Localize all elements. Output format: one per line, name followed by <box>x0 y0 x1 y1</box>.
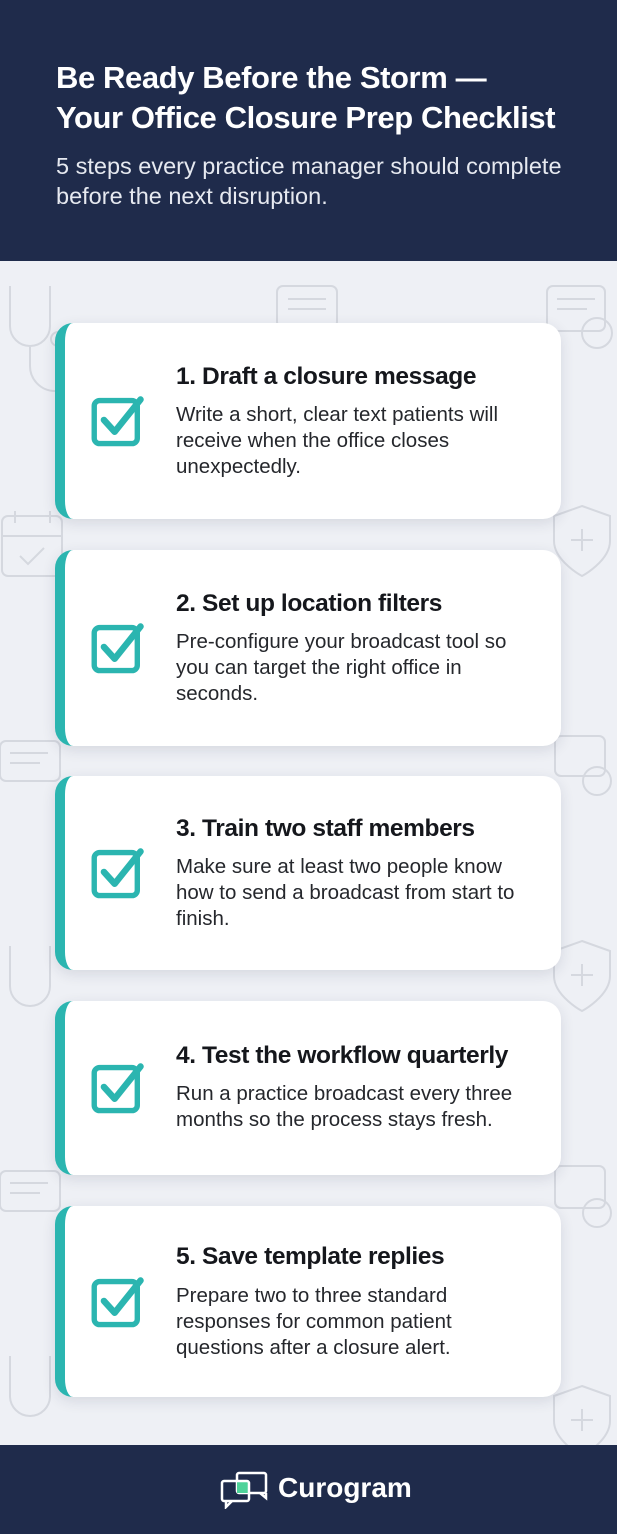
icon: checkbox <box>92 1277 144 1328</box>
step 5 text <box>176 1284 452 1359</box>
brand name: Curogram <box>278 1472 412 1503</box>
step 2 text <box>176 630 506 705</box>
step 4 text: months so the process stays fresh. <box>176 1108 493 1131</box>
header: Your Office Closure Prep Checklist <box>56 100 555 135</box>
subtitle: 5 steps every practice manager should complete <box>56 153 562 179</box>
step 1 text: Write a short, clear text patients will <box>176 403 498 426</box>
step 4 text: Run a practice broadcast every three <box>176 1082 512 1105</box>
step 1 text <box>176 403 498 478</box>
step 3 text <box>176 855 514 930</box>
step 3 text: how to send a broadcast from start to <box>176 881 514 904</box>
card 2 <box>55 550 561 746</box>
step 1 text: unexpectedly. <box>176 455 301 478</box>
step 3 title: 3. Train two staff members <box>176 815 475 842</box>
header: before the next disruption. <box>56 183 328 209</box>
logo <box>220 1472 412 1509</box>
card 4 <box>55 1001 561 1175</box>
icon: checkbox <box>92 623 144 674</box>
step 2 title: 2. Set up location filters <box>176 590 442 617</box>
icon: checkbox <box>92 848 144 898</box>
step 1 title: 1. Draft a closure message <box>176 363 476 390</box>
step 5 text: responses for common patient <box>176 1310 452 1333</box>
step 4 text <box>176 1082 512 1131</box>
title: Be Ready Before the Storm — <box>56 60 486 95</box>
step 2 text: Pre-configure your broadcast tool so <box>176 630 506 653</box>
step 5 text: questions after a closure alert. <box>176 1336 451 1359</box>
step 5 text: Prepare two to three standard <box>176 1284 447 1307</box>
step 3 text: Make sure at least two people know <box>176 855 502 878</box>
card 3 <box>55 776 561 970</box>
step 1 text: receive when the office closes <box>176 429 449 452</box>
background icons <box>0 285 613 1445</box>
step 5 title: 5. Save template replies <box>176 1243 444 1270</box>
step 2 text: you can target the right office in <box>176 656 462 679</box>
card 1 <box>55 323 561 519</box>
header <box>0 0 617 261</box>
step 2 text: seconds. <box>176 682 258 705</box>
footer <box>0 1445 617 1534</box>
icon: chat bubbles <box>220 1472 268 1509</box>
step 3 text: finish. <box>176 907 230 930</box>
icon: checkbox <box>92 1063 144 1114</box>
step 4 title: 4. Test the workflow quarterly <box>176 1042 508 1069</box>
icon: checkbox <box>92 396 144 446</box>
card 5 <box>55 1206 561 1397</box>
